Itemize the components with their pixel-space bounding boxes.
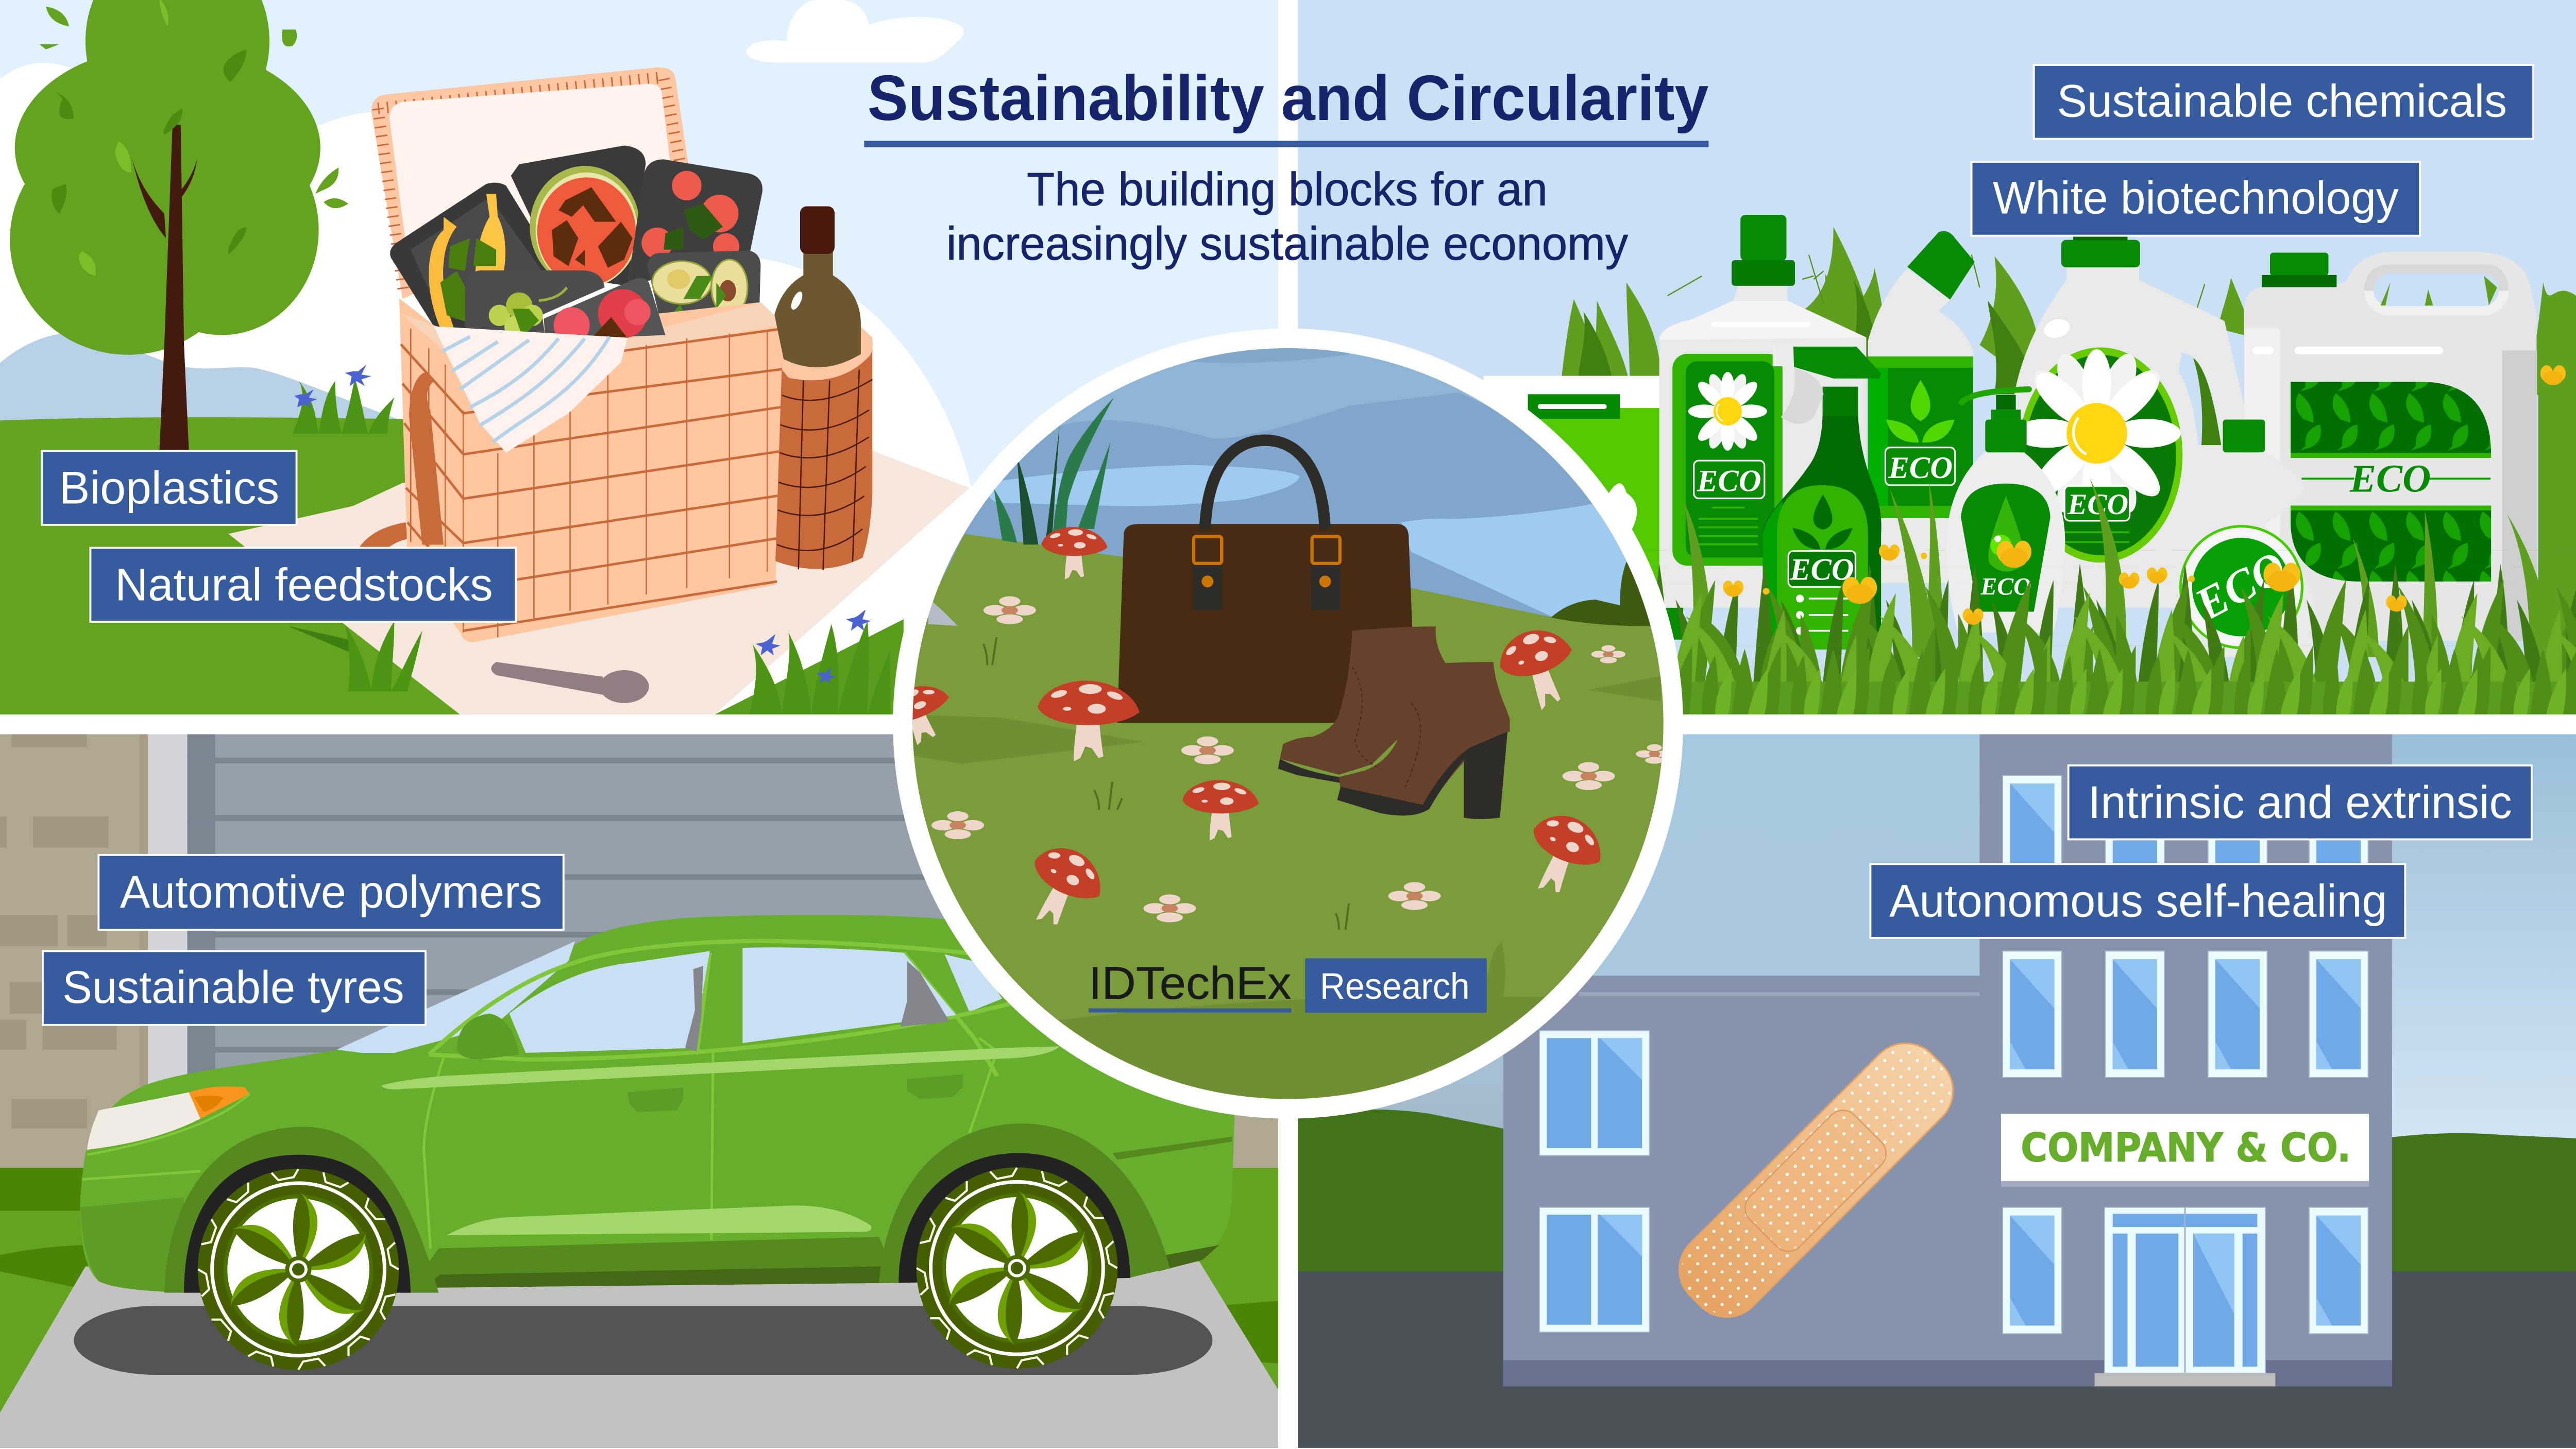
basket body [399, 298, 784, 642]
central circle: leather and fungi scene [874, 337, 1676, 1125]
panel: chemicals eco bottles [1298, 0, 2576, 714]
bush [1551, 562, 1659, 626]
car [80, 915, 1235, 1293]
rock [928, 598, 958, 626]
food tray: banana [390, 183, 558, 335]
wall right of car [1232, 1115, 1278, 1171]
label: Natural feedstocks [90, 548, 516, 622]
food tray: tomatoes [628, 159, 762, 286]
bottle: large detergent [2011, 236, 2247, 608]
road [1298, 1271, 2576, 1449]
label: Sustainable chemicals: Sustainable chemicals [2057, 75, 2507, 126]
distant hills [0, 334, 398, 420]
side holder [775, 322, 873, 570]
far band [1150, 337, 1380, 363]
grass tufts [293, 378, 890, 714]
grass long blades [1684, 386, 2576, 690]
foreground grass front [1643, 583, 2576, 714]
reflection top [381, 1046, 1060, 1089]
jerrycan: ECO [2349, 457, 2431, 501]
central circle: white ring [893, 329, 1683, 1119]
label: Autonomous self-healing [1870, 864, 2405, 938]
side windows [1539, 1031, 1650, 1332]
label: Intrinsic and extrinsic [2069, 765, 2532, 839]
rear window [742, 947, 956, 1043]
title: Sustainability and Circularity [868, 62, 1708, 134]
brick wall [0, 734, 188, 1168]
label: Sustainable tyres [43, 951, 426, 1025]
bottle: round eco sticker [2180, 419, 2315, 657]
tuft flowers [294, 365, 871, 684]
windshield [337, 941, 575, 1053]
bottle: soap pump: ECO [1980, 573, 2031, 600]
bottle: daisy label [1659, 215, 1866, 608]
basket clasp [353, 522, 408, 567]
garage door [188, 734, 1278, 1178]
wine bottle [774, 207, 861, 367]
striped napkin [434, 326, 628, 453]
step [2095, 1373, 2275, 1386]
front wheel [198, 1169, 399, 1370]
ground [0, 417, 477, 714]
food tray: watermelon [511, 146, 646, 287]
bottle: spray: ECO [1789, 553, 1854, 587]
headlight [87, 1093, 200, 1150]
tower windows [2003, 775, 2368, 1334]
grass shadow [287, 626, 349, 652]
label: Automotive polymers [98, 855, 564, 930]
building [1503, 734, 2392, 1386]
door lines [424, 1038, 997, 1248]
background grass dark [1577, 279, 2221, 444]
subtitle [946, 164, 1629, 270]
label: Sustainable tyres: Sustainable tyres [62, 961, 404, 1013]
subtitle: The building blocks for an [1027, 164, 1548, 216]
lake right [1401, 504, 1676, 633]
label: Autonomous self-healing: Autonomous self-healing [1889, 875, 2387, 926]
spoon bowl [600, 670, 649, 703]
front bumper shade [80, 1198, 184, 1293]
bottle: large detergent: ECO [2067, 488, 2128, 521]
cloud [746, 0, 964, 62]
foreground grass back [1643, 550, 2576, 714]
logo: Research: Research [1320, 966, 1470, 1007]
reflection bottom [447, 1205, 871, 1235]
box [1483, 376, 1684, 687]
sill [411, 1237, 899, 1288]
meadow [904, 534, 1676, 1117]
hills [1298, 1110, 2576, 1281]
rear wheel [916, 1167, 1117, 1369]
seats [685, 961, 950, 1051]
sky left [1298, 734, 1988, 1129]
bottle: round eco sticker: ECO [2187, 541, 2294, 631]
mushrooms [874, 527, 1612, 940]
label: Automotive polymers: Automotive polymers [120, 866, 542, 917]
lawn [0, 1168, 1278, 1449]
panel: self-healing building [1298, 734, 2576, 1449]
window trim [429, 941, 1010, 1076]
car shadow [74, 1306, 1212, 1375]
logo: Research [1305, 958, 1487, 1013]
foreground grass mid [1643, 567, 2576, 714]
basket side strap [409, 372, 444, 544]
sign [2001, 1114, 2369, 1187]
white hill [0, 63, 973, 723]
sign: COMPANY & CO. [2021, 1125, 2351, 1171]
label: Bioplastics: Bioplastics [59, 462, 279, 513]
bottle: cleaner [1868, 231, 1975, 583]
label: Bioplastics [42, 451, 297, 525]
jerrycan [2244, 252, 2537, 641]
bottle: daisy label: ECO [1697, 464, 1761, 498]
flowers [931, 596, 1673, 923]
food tray: berries [544, 278, 665, 343]
subtitle: increasingly sustainable economy [946, 218, 1629, 270]
grass sprigs [1668, 254, 2374, 320]
logo: IDTechEx: IDTechEx [1089, 957, 1291, 1009]
label: Natural feedstocks: Natural feedstocks [115, 559, 493, 610]
door [2105, 1207, 2265, 1373]
rear quarter window [945, 954, 1002, 1012]
basket lid [371, 67, 688, 299]
front window [510, 951, 710, 1053]
plaster [1663, 1027, 1970, 1334]
foreground grass base [1643, 645, 2576, 714]
spoon [491, 662, 603, 695]
label: Sustainable chemicals [2034, 65, 2533, 139]
tree [10, 0, 348, 452]
bottle: spray [1762, 345, 1882, 650]
bottle: cleaner: ECO [1888, 451, 1953, 485]
arches [164, 1127, 438, 1293]
panel: bioplastics picnic scene [0, 0, 1278, 723]
sky right [2382, 734, 2576, 1145]
hill band [904, 393, 1676, 657]
bottle: soap pump [1946, 389, 2065, 633]
boots [1278, 626, 1510, 819]
label: White biotechnology: White biotechnology [1993, 172, 2399, 224]
buttercups [1723, 365, 2566, 625]
lake left [987, 465, 1299, 506]
grass sprigs [984, 637, 1349, 930]
rear bumper stripe [1112, 1137, 1232, 1160]
food tray: avocado [647, 251, 760, 335]
label: Intrinsic and extrinsic: Intrinsic and extrinsic [2088, 776, 2512, 828]
meadow shadow [912, 676, 1676, 1117]
food tray: grapes [465, 270, 604, 339]
door handles [628, 1074, 963, 1112]
label: White biotechnology [1972, 162, 2420, 236]
driveway [0, 1262, 1278, 1449]
panel: automotive green car [0, 734, 1278, 1449]
mirror [456, 1014, 519, 1060]
grass corner [715, 619, 904, 714]
reeds [994, 398, 1114, 550]
background grass [1561, 227, 2576, 427]
picnic cloth [228, 450, 969, 714]
rear bumper shade [1158, 1245, 1219, 1271]
handbag [1117, 440, 1412, 723]
